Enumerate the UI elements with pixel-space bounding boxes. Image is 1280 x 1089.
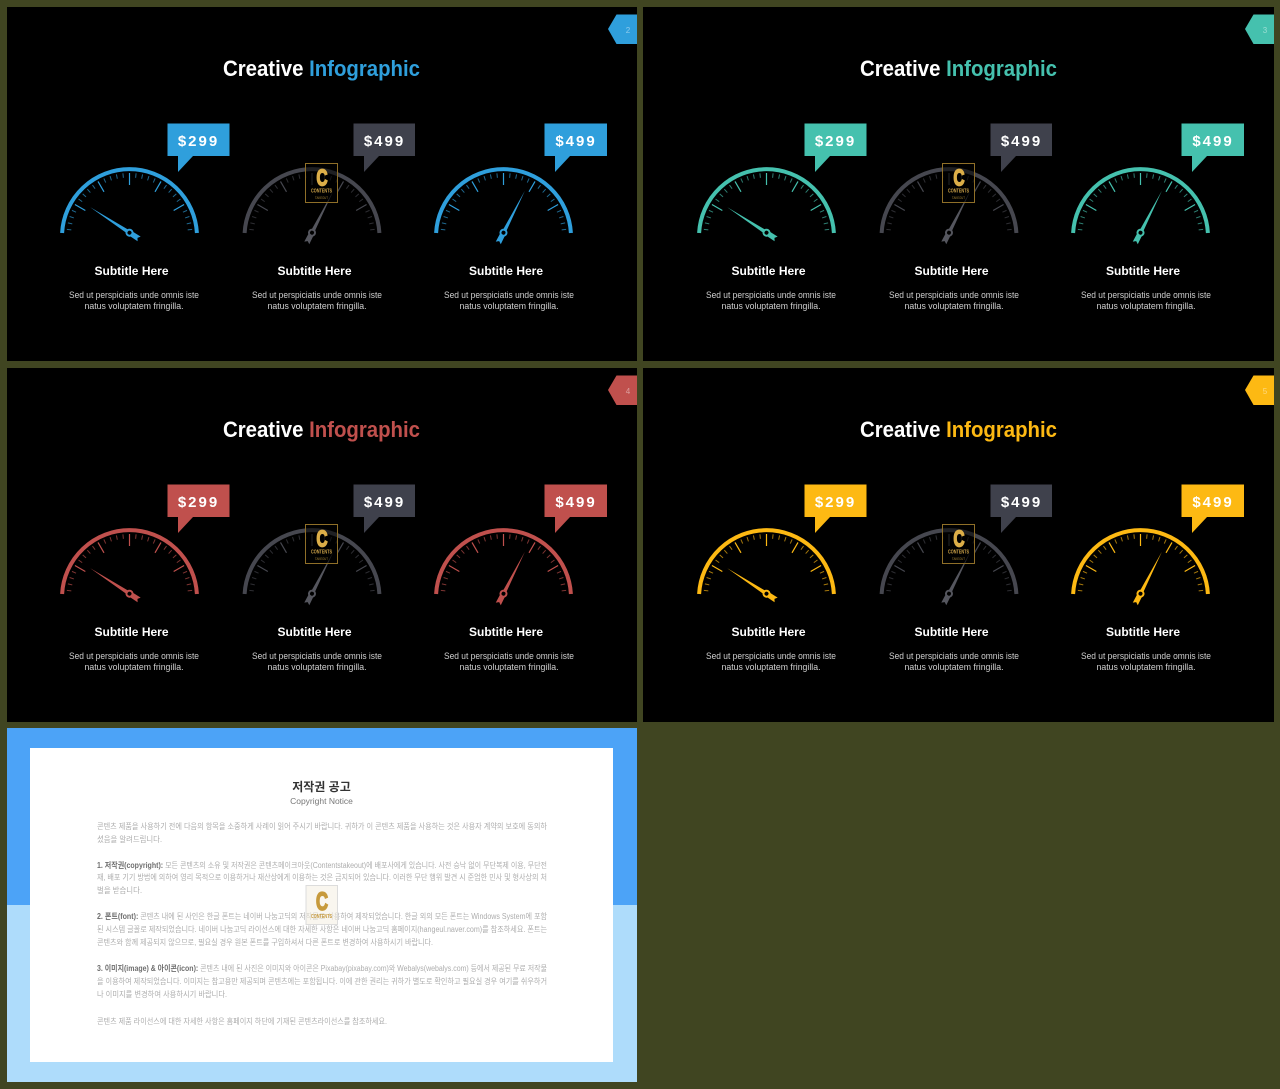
slide background [643,368,1274,722]
price callout 2 [354,484,415,533]
price callout 3 [1182,124,1244,172]
watermark logo: TAKEOUT [315,196,329,200]
watermark logo [306,164,338,202]
watermark logo: TAKEOUT [315,557,329,561]
paragraph 1: copyright: 1. 저작권(copyright): 모든 콘텐츠의 소유 및 저작권은 콘텐츠메이크아웃(Contentstakeout)에 배포사에게 있습니다. 사전 승낙 없이 무단복제 이용, 무단전 [97,860,547,870]
watermark logo: C [316,526,328,552]
closing line: 콘텐츠 제품 라이선스에 대한 자세한 사항은 홈페이지 하단에 기재된 콘텐츠라이선스를 참조하세요. [97,1016,387,1026]
paragraph 2: font: 된 시스템 글꼴로 제작되었습니다. 네이버 나눔고딕 라이선스에 대한 자세한 사항은 네이버 나눔고딕 홈페이지(hangeul.naver.com)를 참조하세요. 폰트는 [97,924,547,934]
watermark logo [306,886,338,924]
paragraph 3: image and icon: 3. 이미지(image) & 아이콘(icon): 콘텐츠 내에 된 사진은 이미지와 아이콘은 Pixabay(pixabay.com)와 Webalys(webalys.com) 등에서 제공된 무료 저작물 [97,963,547,973]
slide 2: teal [643,7,1274,361]
text block 1: Sed ut perspiciatis unde omnis iste [706,290,836,300]
text block 2: natus voluptatem fringilla. [268,662,366,672]
text block 2: natus voluptatem fringilla. [904,662,1004,672]
price callout 1: $299 [815,133,856,150]
slide 4: yellow [643,368,1274,722]
watermark logo [306,524,338,564]
watermark logo: TAKEOUT [952,196,966,200]
paragraph 3: image and icon [97,963,547,999]
text block 3: Subtitle Here [469,264,543,278]
price callout 1 [168,484,230,533]
page tab: 4 [626,387,631,396]
slide background [7,7,637,361]
text block 3: Subtitle Here [1106,264,1180,278]
text block 3 [444,625,574,672]
paragraph 1: copyright: 벌을 받습니다. [97,885,142,895]
text block 1: Subtitle Here [94,625,169,639]
gauge 3 [1073,169,1208,244]
gauge 3 [1073,530,1208,605]
page tab: 3 [1263,26,1268,35]
text block 3: natus voluptatem fringilla. [460,301,558,311]
text block 1 [69,625,199,672]
intro paragraph: 콘텐츠 제품을 사용하기 전에 다음의 항목을 소중하게 사례이 읽어 주시기 바랍니다. 귀하가 이 콘텐츠 제품을 사용하는 것은 사용자 계약의 보호에 동의하 [97,821,548,831]
slide 3: red [7,368,637,722]
page tab [608,376,637,405]
slide background [643,7,1274,361]
title: Creative Infographic [860,417,1057,442]
text block 1: Subtitle Here [731,625,806,639]
text block 2 [889,625,1019,672]
gauge 1 [699,530,834,602]
price callout 3 [544,124,607,172]
watermark logo: C [316,164,328,190]
page tab [608,14,637,44]
gauge 2 [882,530,1016,605]
text block 2 [889,264,1019,311]
watermark logo: TAKEOUT [952,557,966,561]
gauge 1 [62,530,197,602]
watermark logo [942,164,974,202]
watermark logo: CONTENTS [311,914,333,920]
text block 2: Sed ut perspiciatis unde omnis iste [889,290,1019,300]
text block 2: natus voluptatem fringilla. [904,301,1004,311]
text block 1: natus voluptatem fringilla. [84,301,184,311]
background upper band [7,728,637,905]
text block 2: Sed ut perspiciatis unde omnis iste [889,651,1019,661]
slide 5: copyright notice [7,728,637,1082]
intro paragraph: 셨음을 알려드립니다. [97,834,162,844]
text block 1: Sed ut perspiciatis unde omnis iste [706,651,836,661]
price callout 3 [544,484,607,533]
text block 3 [1081,625,1211,672]
text block 2: Subtitle Here [277,264,352,278]
price callout 2: $499 [1001,133,1042,150]
text block 3: natus voluptatem fringilla. [460,662,558,672]
watermark logo: C [954,164,964,190]
gauge 3 [436,169,571,244]
paragraph 2: font [97,911,548,947]
watermark logo: CONTENTS [311,188,333,194]
paragraph 1: copyright: 재, 배포 기기 방법에 의하여 영리 목적으로 이용하거나 재산상에게 이용하는 것은 금지되어 있습니다. 이러한 무단 행위 발견 시 준엄한 민사 및 형사상의 처 [97,872,547,882]
price callout 2 [354,124,415,172]
page tab [1245,376,1274,405]
text block 1: natus voluptatem fringilla. [722,301,820,311]
text block 2: Sed ut perspiciatis unde omnis iste [252,290,382,300]
price callout 1 [804,484,866,533]
price callout 1: $299 [815,494,856,511]
price callout 1 [168,124,230,172]
paragraph 1: copyright [97,860,547,895]
gauge 3 [436,530,571,605]
text block 1: Sed ut perspiciatis unde omnis iste [69,651,199,661]
gauge 1 [699,169,834,241]
text block 1: Sed ut perspiciatis unde omnis iste [69,290,199,300]
price callout 1 [804,124,866,172]
gauge 1 [62,169,197,241]
price callout 1: $299 [178,494,219,511]
price callout 2: $499 [364,133,405,150]
text block 2 [252,625,382,672]
text block 3: Sed ut perspiciatis unde omnis iste [1081,651,1211,661]
paragraph 2: font: 2. 폰트(font): 콘텐츠 내에 된 사인은 한글 폰트는 네이버 나눔고딕의 저작물로 사용하여 제작되었습니다. 한글 외의 모든 폰트는 Windows System에 포함 [97,911,548,921]
text block 3: natus voluptatem fringilla. [1096,662,1196,672]
background lower band [7,905,637,1082]
text block 3 [1081,264,1211,311]
watermark logo: C [316,888,328,916]
text block 2: Subtitle Here [914,264,989,278]
notice heading: 저작권 공고 [292,779,351,794]
page tab [1245,14,1274,44]
paragraph 2: font: 콘텐츠와 함께 제공되지 않으므로, 필요실 경우 원본 폰트를 구입하셔서 다른 폰트로 변경하여 사용하시기 바랍니다. [97,937,433,947]
text block 3: natus voluptatem fringilla. [1096,301,1196,311]
white notice panel [30,748,613,1062]
price callout 1: $299 [178,133,219,150]
paragraph 3: image and icon: 을 이용하여 제작되었습니다. 이미지는 참고용만 제공되며 콘텐츠에는 포함됩니다. 이에 관한 권리는 귀하가 별도로 확인하고 필요실 경우 여기를 쉬우하거 [97,976,547,986]
gauge 2 [245,169,379,244]
slide 1: blue [7,7,637,361]
price callout 3: $499 [1192,494,1234,511]
notice heading: Copyright Notice [290,796,353,806]
text block 3: Subtitle Here [1106,625,1180,639]
price callout 2: $499 [1001,494,1042,511]
watermark logo: CONTENTS [948,188,970,194]
gauge 2 [245,530,379,605]
price callout 2 [990,484,1052,533]
text block 3: Sed ut perspiciatis unde omnis iste [444,651,574,661]
intro paragraph [97,821,548,844]
title: Creative Infographic [223,417,420,442]
page tab: 2 [626,26,631,35]
text block 2: Subtitle Here [914,625,989,639]
text block 3: Sed ut perspiciatis unde omnis iste [444,290,574,300]
text block 2: Sed ut perspiciatis unde omnis iste [252,651,382,661]
slide background [7,368,637,722]
text block 2: natus voluptatem fringilla. [268,301,366,311]
price callout 3: $499 [1192,133,1234,150]
price callout 3 [1182,484,1244,533]
price callout 3: $499 [555,494,597,511]
watermark logo [942,524,974,564]
text block 1 [706,625,836,672]
text block 1: natus voluptatem fringilla. [722,662,820,672]
text block 2: Subtitle Here [277,625,352,639]
price callout 2: $499 [364,494,405,511]
watermark logo: CONTENTS [311,550,333,556]
text block 3: Sed ut perspiciatis unde omnis iste [1081,290,1211,300]
text block 2 [252,264,382,311]
text block 1: natus voluptatem fringilla. [84,662,184,672]
text block 1: Subtitle Here [731,264,806,278]
watermark logo: C [954,526,964,552]
title: Creative Infographic [860,56,1057,81]
gauge 2 [882,169,1016,244]
text block 1: Subtitle Here [94,264,169,278]
watermark logo: CONTENTS [948,550,970,556]
text block 1 [706,264,836,311]
text block 3: Subtitle Here [469,625,543,639]
paragraph 3: image and icon: 나 이미지를 변경하여 사용하시기 바랍니다. [97,989,227,999]
text block 1 [69,264,199,311]
price callout 3: $499 [555,133,597,150]
price callout 2 [990,124,1052,172]
notice heading [290,779,353,806]
text block 3 [444,264,574,311]
title: Creative Infographic [223,56,420,81]
page tab: 5 [1263,387,1268,396]
